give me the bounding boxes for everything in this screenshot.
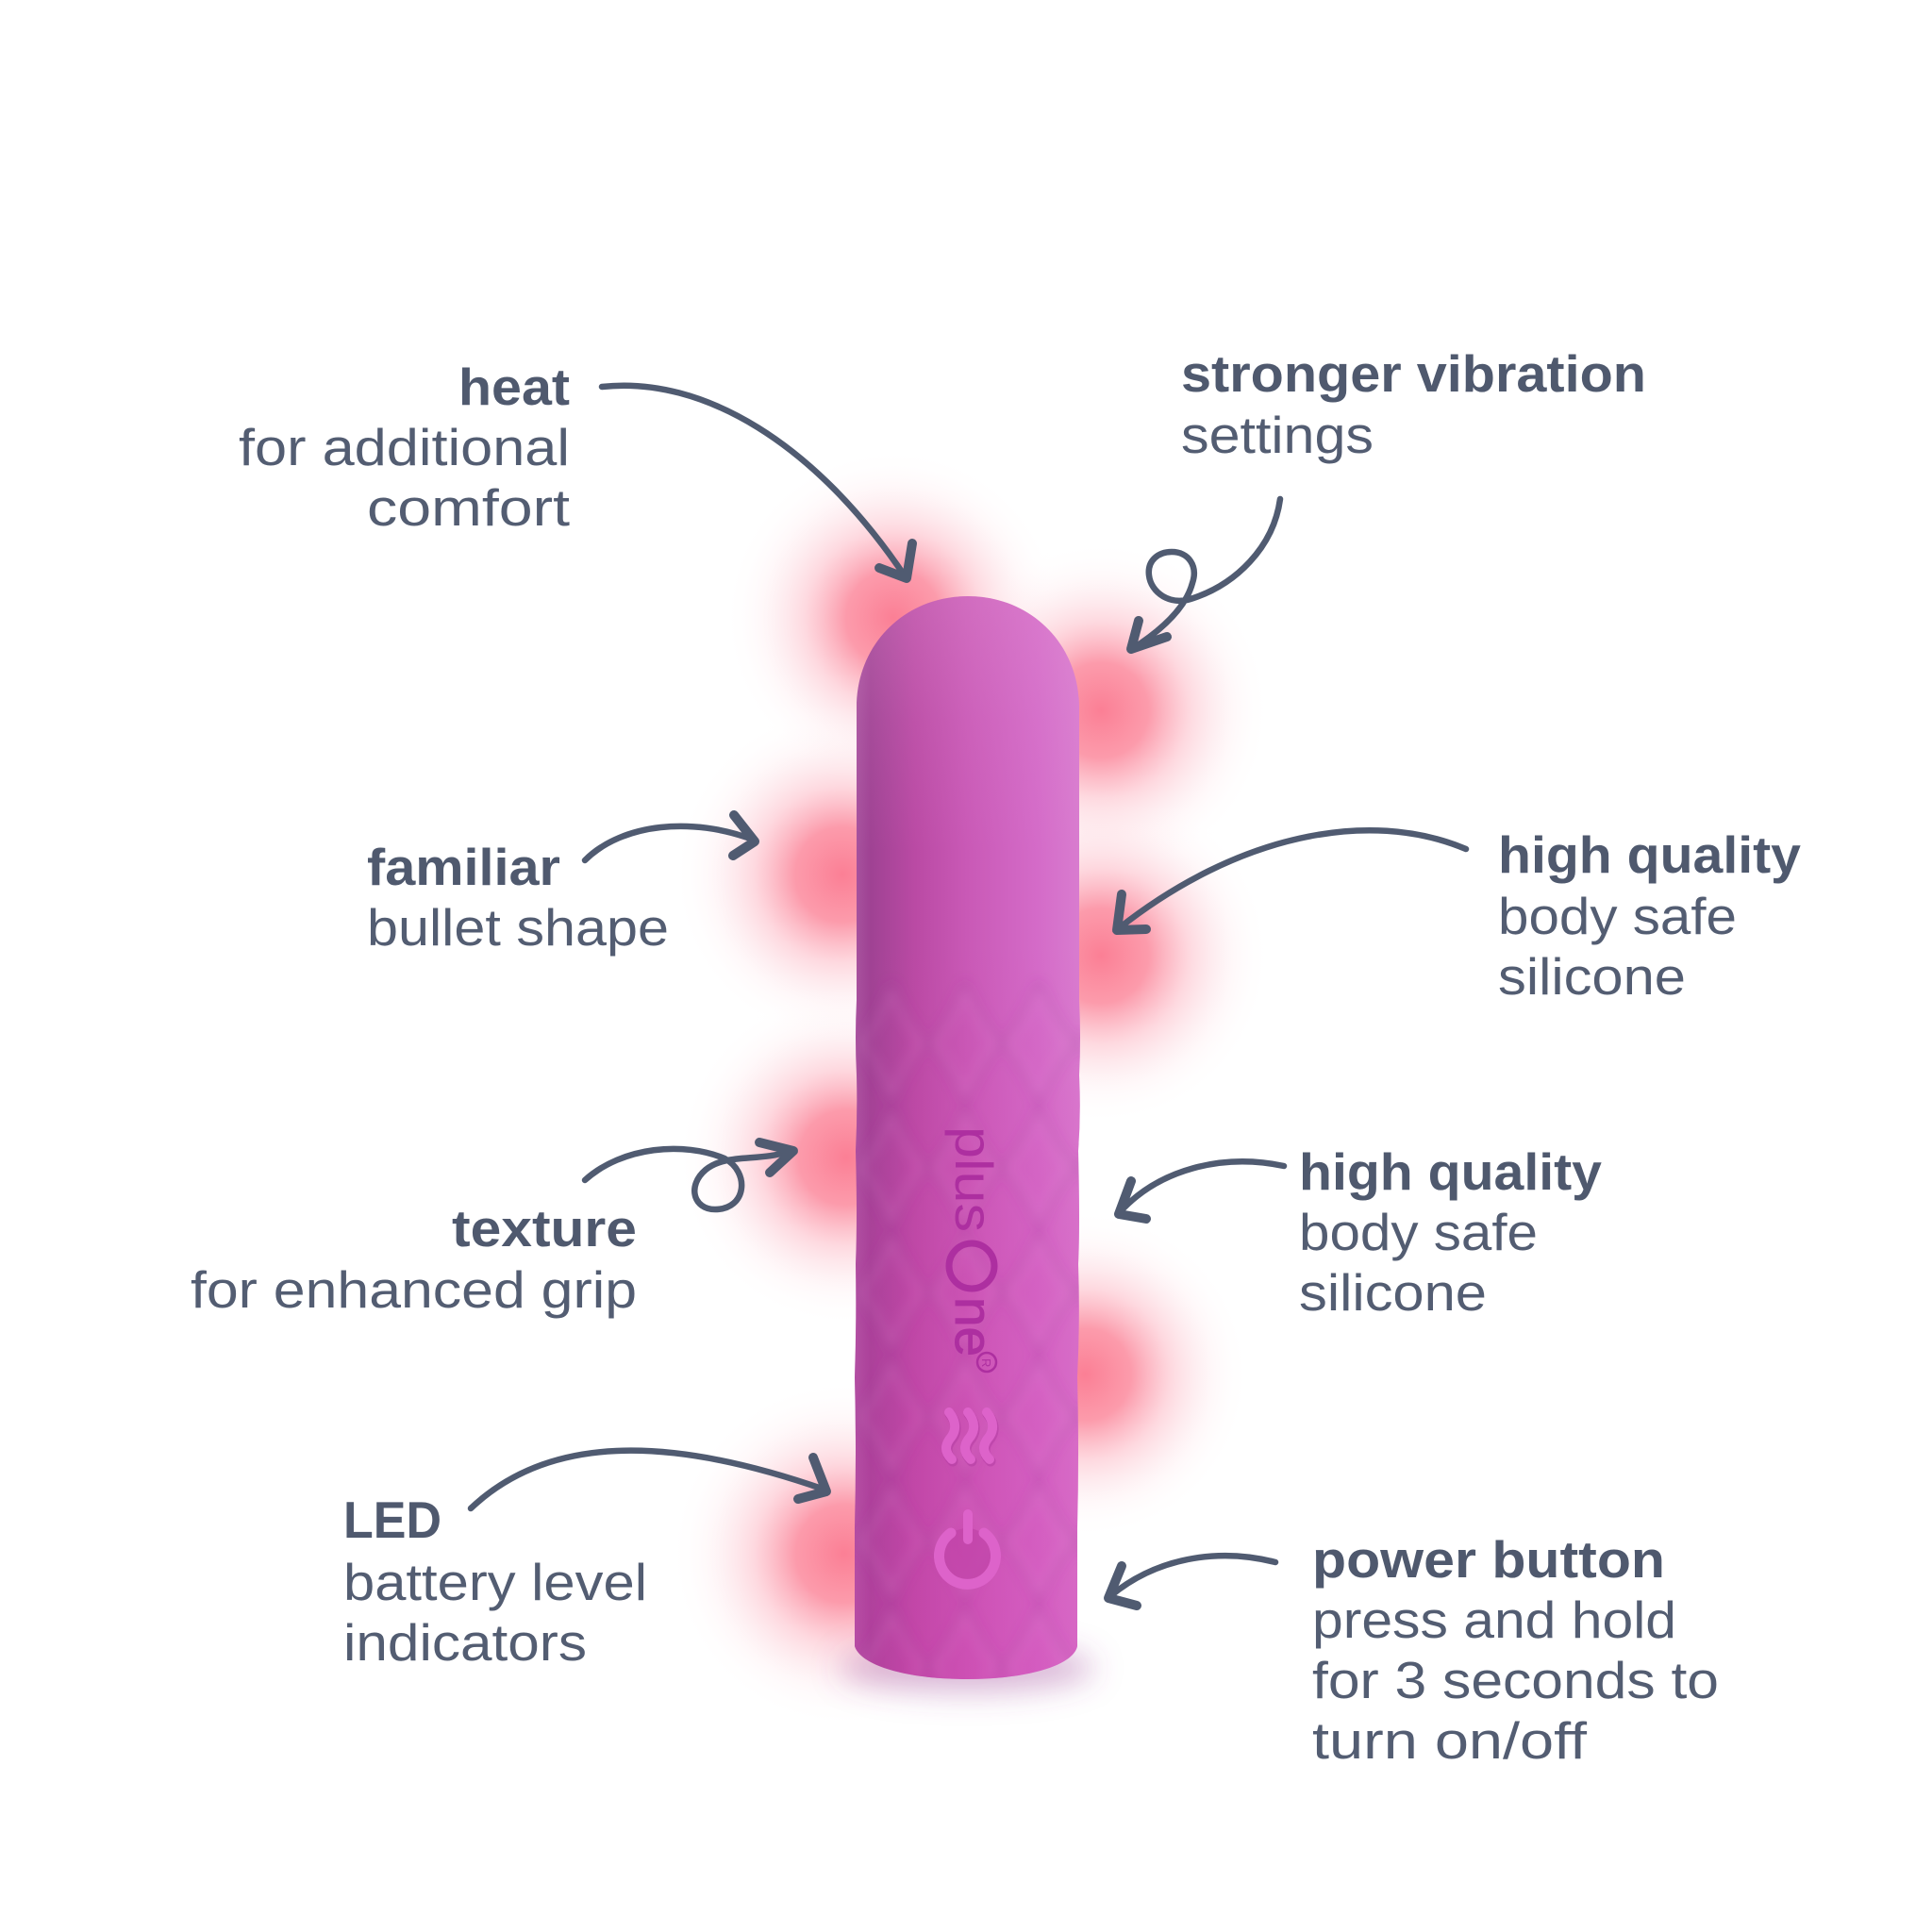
callout: familiar shape: bullet shape xyxy=(367,898,669,957)
callout: heat xyxy=(239,358,570,537)
callout: stronger vibration xyxy=(1181,344,1646,464)
callout: high quality lower: high quality xyxy=(1299,1142,1602,1201)
callout: high quality lower: silicone xyxy=(1299,1263,1487,1322)
callout: texture xyxy=(191,1199,637,1319)
callout: familiar shape xyxy=(367,838,669,957)
callout: high quality upper: high quality xyxy=(1498,825,1801,884)
callout: power button: power button xyxy=(1312,1530,1665,1589)
arrow: heat xyxy=(602,386,912,578)
callout: LED: LED xyxy=(343,1491,441,1549)
callout: texture: for enhanced grip xyxy=(191,1260,637,1319)
callout: power button xyxy=(1312,1530,1719,1770)
product shadow xyxy=(840,1643,1094,1692)
callout: high quality lower xyxy=(1299,1142,1602,1322)
icon: vibration waves xyxy=(946,1412,993,1461)
brand logo: plus xyxy=(944,1126,1004,1232)
arrow: stronger vibration with loop xyxy=(1131,499,1280,649)
brand logo: ne xyxy=(944,1297,1004,1357)
callout: LED: battery level xyxy=(343,1553,647,1611)
callout: power button: for 3 seconds to xyxy=(1312,1651,1719,1709)
arrow: familiar shape xyxy=(585,815,755,860)
callout: LED xyxy=(343,1491,647,1672)
callout: stronger vibration: settings xyxy=(1181,406,1374,464)
brand logo xyxy=(944,1126,1004,1372)
callout: heat: comfort xyxy=(367,478,570,537)
arrow: power button xyxy=(1108,1556,1275,1606)
callout: stronger vibration: stronger vibration xyxy=(1181,344,1646,403)
callout: heat: for additional xyxy=(239,418,570,476)
product: bullet vibrator xyxy=(849,590,1085,1684)
callout: high quality upper: body safe xyxy=(1498,887,1737,945)
heat glow spots xyxy=(670,448,1271,1728)
callout: power button: press and hold xyxy=(1312,1591,1676,1649)
arrow: LED xyxy=(471,1451,826,1508)
brand logo: R xyxy=(979,1358,993,1367)
callout: LED: indicators xyxy=(343,1613,587,1672)
callout: high quality upper xyxy=(1498,825,1801,1006)
arrow: texture with loop xyxy=(585,1142,793,1209)
callout: high quality upper: silicone xyxy=(1498,947,1686,1006)
callout: power button: turn on/off xyxy=(1312,1711,1588,1770)
callout: texture: texture xyxy=(452,1199,637,1257)
callout: high quality lower: body safe xyxy=(1299,1203,1538,1261)
arrow: high quality lower xyxy=(1119,1161,1284,1219)
icon: power symbol xyxy=(940,1514,996,1584)
callout: heat: heat xyxy=(458,358,570,416)
arrow: high quality upper xyxy=(1117,830,1466,930)
callout: familiar shape: familiar xyxy=(367,838,560,896)
